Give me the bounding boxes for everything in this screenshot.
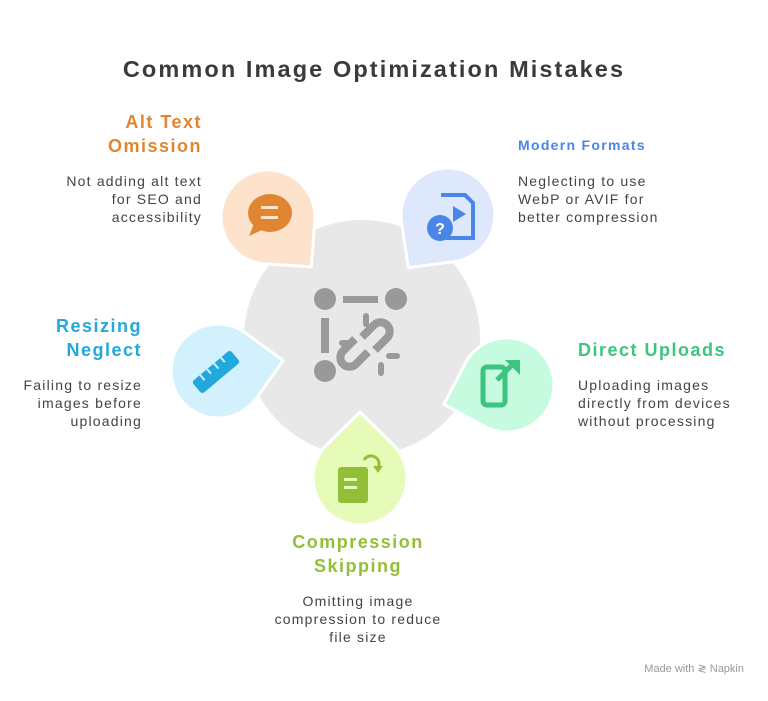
desc: modern formats: better compression [518, 209, 659, 225]
icon: speech bubble [248, 194, 292, 236]
desc: direct uploads: without processing [577, 413, 716, 429]
icon: file with question: ? [435, 221, 445, 238]
label: compression skipping: Compression [292, 532, 424, 552]
desc: alt text: for SEO and [112, 191, 202, 207]
teardrop: modern formats [371, 149, 514, 296]
desc: direct uploads [577, 377, 731, 429]
desc: compression: Omitting image [303, 593, 413, 609]
title: Common Image Optimization Mistakes [123, 56, 625, 82]
icon: file compress [338, 456, 383, 503]
teardrop: resizing [164, 314, 291, 425]
desc: alt text: Not adding alt text [66, 173, 202, 189]
desc: modern formats: Neglecting to use [518, 173, 647, 189]
icon: ruler [192, 350, 240, 394]
label: resizing neglect: Resizing [56, 316, 142, 336]
desc: compression: file size [329, 629, 387, 645]
icon: file with question [427, 195, 473, 241]
icon: phone upload [483, 360, 520, 405]
icon: broken link network [314, 288, 407, 382]
footer credit: Made with ≷ Napkin [644, 663, 744, 675]
label: modern formats: Modern Formats [518, 137, 646, 153]
teardrop: alt text [202, 151, 347, 298]
desc: resizing [24, 377, 142, 429]
desc: resizing: uploading [70, 413, 142, 429]
desc: compression [275, 593, 441, 645]
desc: direct uploads: directly from devices [578, 395, 731, 411]
label: compression skipping [292, 532, 424, 576]
desc: compression: compression to reduce [275, 611, 441, 627]
desc: direct uploads: Uploading images [578, 377, 709, 393]
desc: alt text: accessibility [112, 209, 202, 225]
desc: alt text [66, 173, 202, 225]
teardrop: direct uploads [430, 326, 566, 449]
label: resizing neglect: Neglect [66, 340, 142, 360]
label: compression skipping: Skipping [314, 556, 402, 576]
teardrop: compression [313, 412, 407, 525]
label: alt text omission: Omission [108, 136, 202, 156]
desc: modern formats [518, 173, 659, 225]
desc: resizing: images before [38, 395, 142, 411]
label: resizing neglect [56, 316, 142, 360]
central gray hub [244, 220, 480, 456]
label: alt text omission [108, 112, 202, 156]
desc: modern formats: WebP or AVIF for [518, 191, 645, 207]
label: direct uploads: Direct Uploads [578, 340, 726, 360]
desc: resizing: Failing to resize [24, 377, 142, 393]
label: alt text omission: Alt Text [125, 112, 202, 132]
